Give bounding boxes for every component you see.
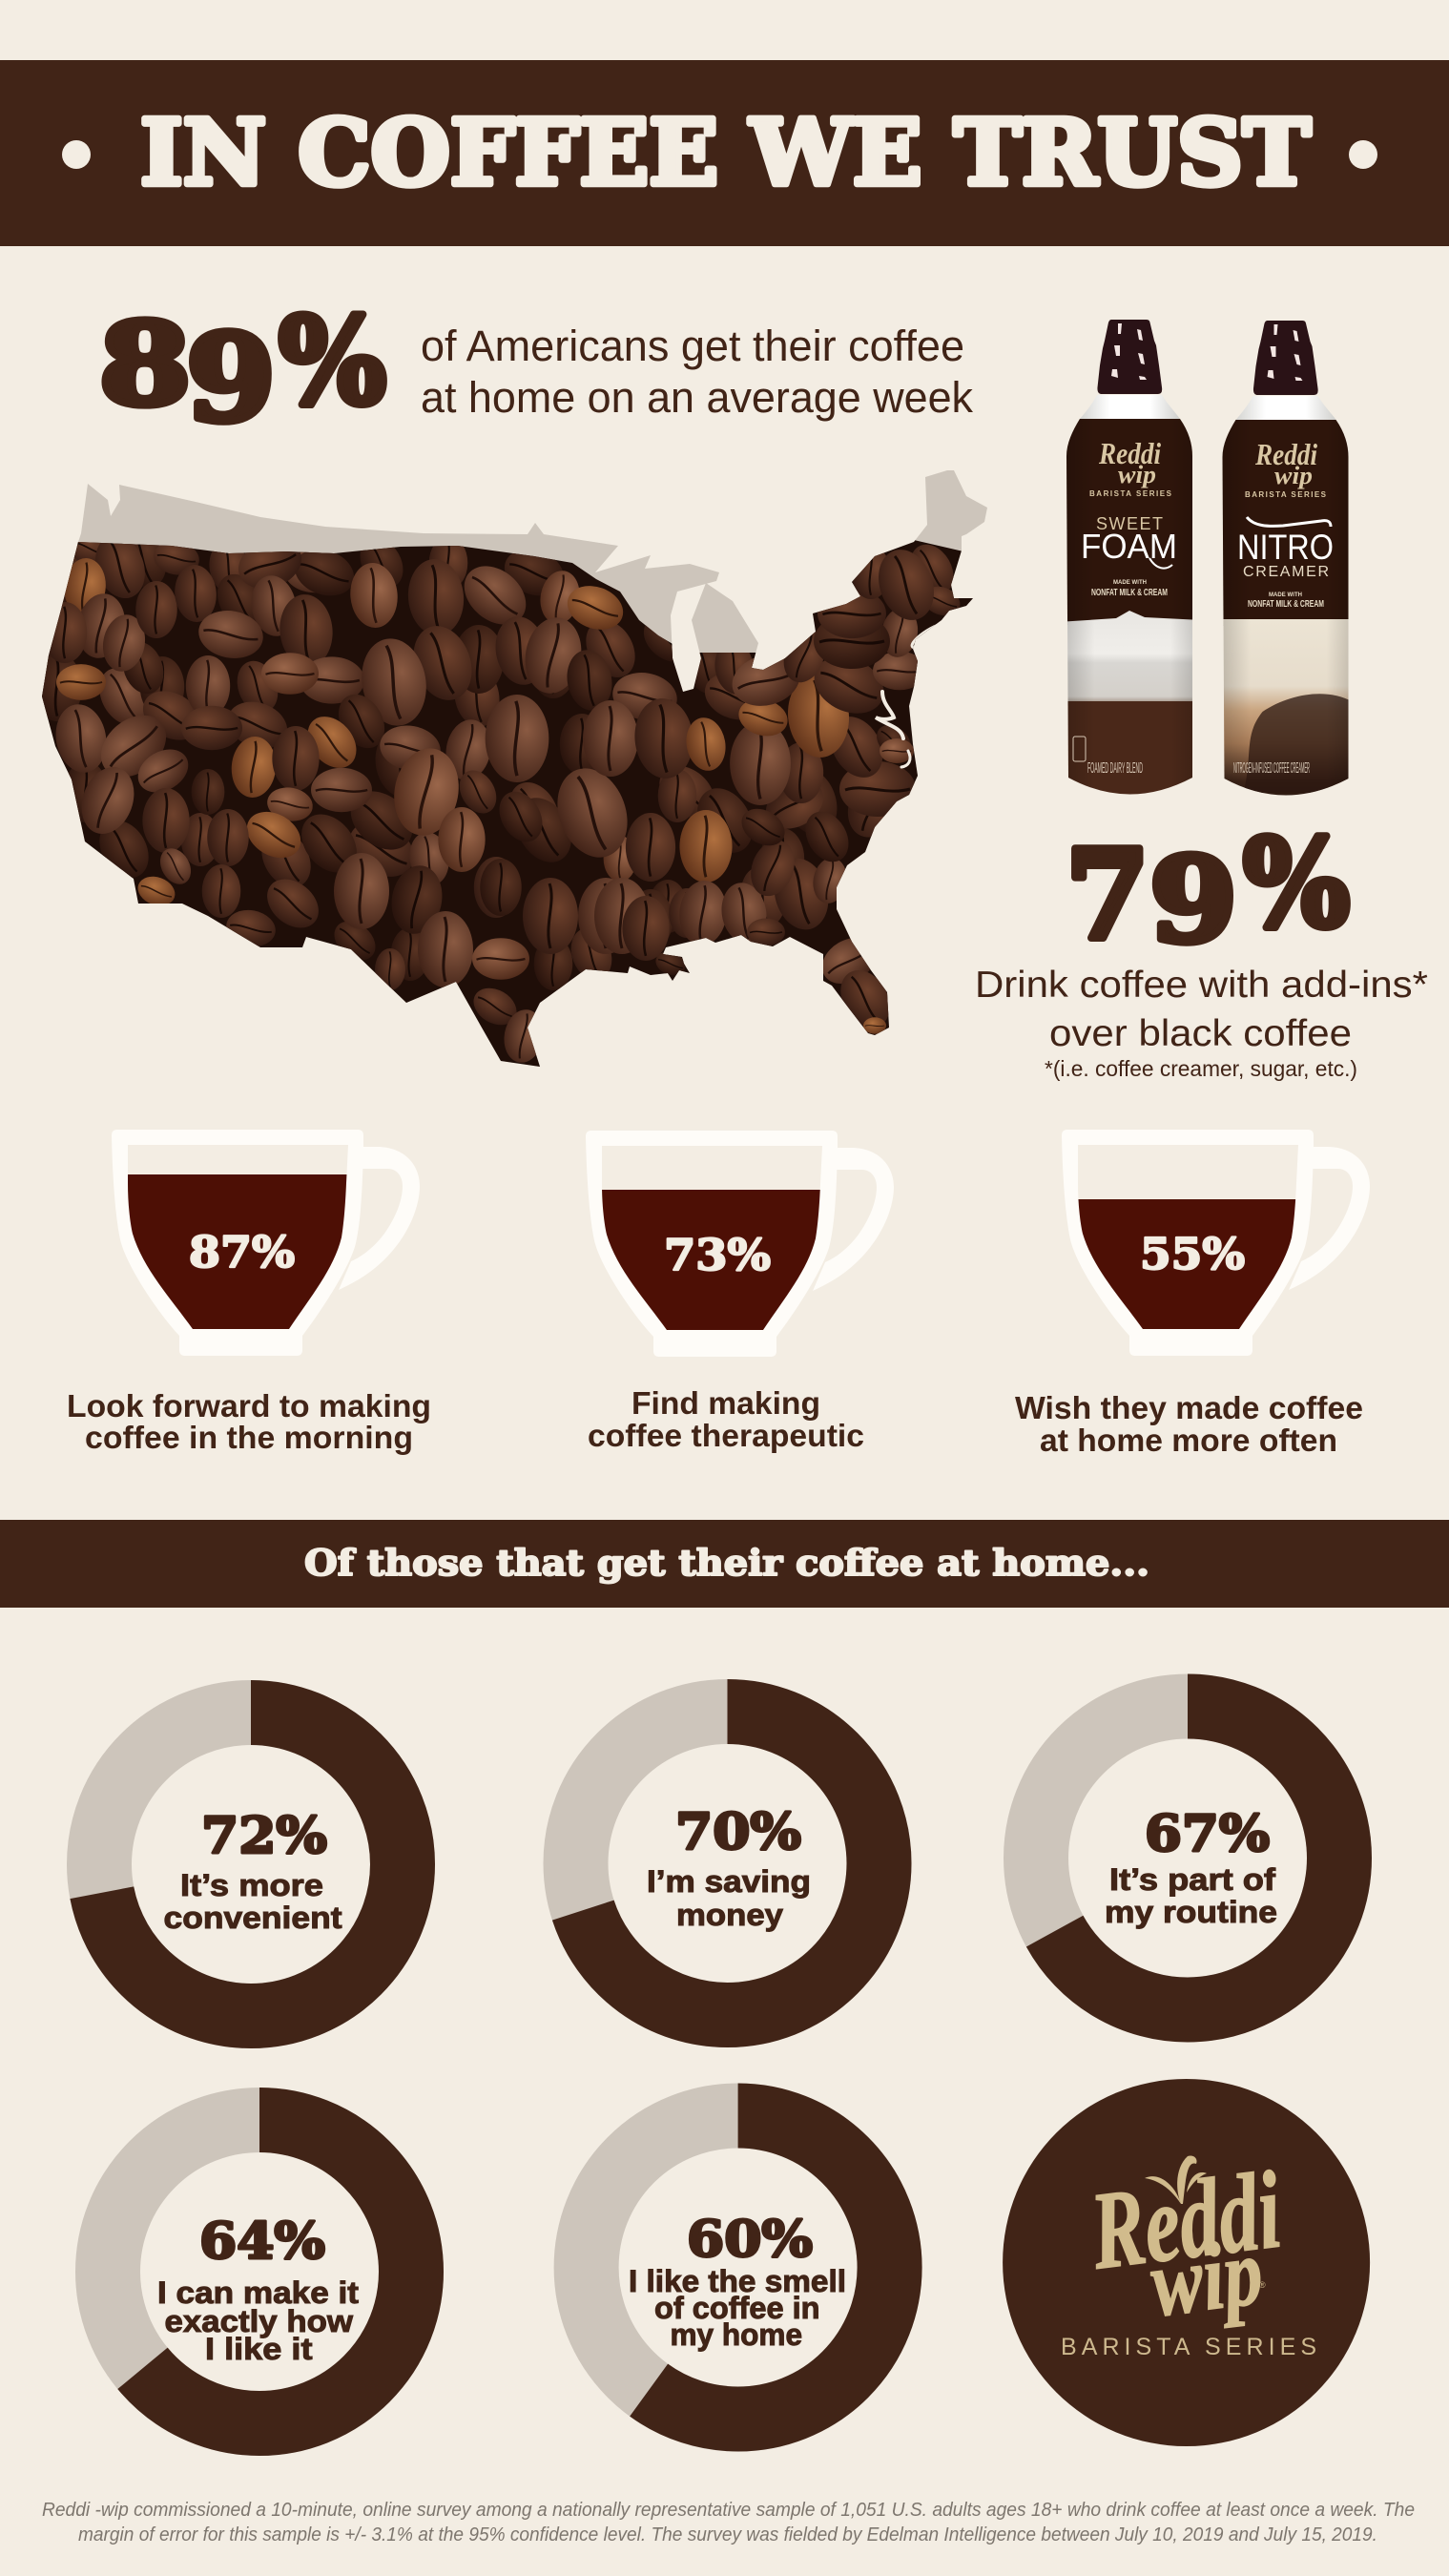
product bottle: Sweet Foam: FOAM xyxy=(1081,527,1177,566)
logo: Reddi-wip Barista Series xyxy=(1003,2079,1370,2446)
product bottle: Nitro Creamer: BARISTA SERIES xyxy=(1245,490,1327,499)
donut: 60%: I like the smell xyxy=(629,2264,846,2298)
stat: 89% at home xyxy=(99,292,973,448)
cut-outs for the Long Island sound and Chesapeake bay xyxy=(874,624,937,769)
donut: 60% xyxy=(587,2116,890,2420)
mug label: 87% xyxy=(67,1388,431,1455)
stat: 89% at home: % xyxy=(279,292,386,431)
stat: 89% at home: at home on an average week xyxy=(421,373,973,422)
section banner: Of those that get their coffee at home... xyxy=(304,1542,1149,1584)
donut: 64%: 64% xyxy=(199,2212,325,2271)
section banner xyxy=(0,1520,1449,1608)
product bottle: Nitro Creamer xyxy=(1223,321,1349,796)
map of the USA filled with coffee beans xyxy=(27,458,1002,1088)
donut: 72% xyxy=(99,1713,403,2016)
product bottle: Sweet Foam: SWEET xyxy=(1096,514,1163,533)
logo: Reddi-wip Barista Series: ® xyxy=(1259,2280,1266,2290)
donut: 60%: 60% xyxy=(687,2211,813,2269)
mug label: 73% xyxy=(588,1385,864,1453)
stat: 79% with add-ins xyxy=(975,813,1428,1081)
mug label: 55% xyxy=(1015,1390,1363,1458)
stat: 79% with add-ins: 9 xyxy=(1149,831,1237,968)
stat: 79% with add-ins: Drink coffee with add-ins* xyxy=(975,965,1428,1006)
donut: 64% xyxy=(108,2120,411,2423)
stat: 79% with add-ins: % xyxy=(1243,813,1350,954)
product bottle: Sweet Foam: FOAMED DAIRY BLEND xyxy=(1087,760,1143,777)
donut: 72%: convenient xyxy=(164,1901,342,1935)
stat: 89% at home: 9 xyxy=(186,309,276,448)
stat: 79% with add-ins: over black coffee xyxy=(1049,1013,1352,1054)
donut: 70%: 70% xyxy=(675,1803,801,1861)
donut: 72%: It’s more xyxy=(180,1868,323,1902)
donut: 60%: my home xyxy=(670,2317,802,2352)
footnote: margin of error for this sample is +/- 3.1% at the 95% confidence level. The survey was fielded by Edelman Intelligence between July 10, 2019 and July 15, 2019. xyxy=(78,2524,1377,2545)
mug label: 87%: coffee in the morning xyxy=(85,1420,413,1455)
donut: 70%: money xyxy=(676,1898,783,1932)
donut: 67% xyxy=(1036,1706,1339,2009)
stat: 89% at home: 8 xyxy=(99,298,191,430)
product bottle: Sweet Foam: BARISTA SERIES xyxy=(1089,489,1172,498)
product bottle: Nitro Creamer: CREAMER xyxy=(1243,564,1329,580)
mug label: 73%: Find making xyxy=(631,1385,820,1421)
mug label: 55%: at home more often xyxy=(1040,1423,1337,1458)
donut: 64%: I can make it xyxy=(157,2275,359,2310)
product bottle: Nitro Creamer: NITRO xyxy=(1237,528,1334,567)
donut: 64%: I like it xyxy=(205,2332,313,2366)
mug: 73%: 73% xyxy=(664,1230,771,1280)
footnote xyxy=(42,2500,1415,2545)
mug label: 73%: coffee therapeutic xyxy=(588,1418,864,1453)
donut: 67%: It’s part of xyxy=(1109,1862,1275,1897)
donut: 60%: of coffee in xyxy=(654,2291,820,2325)
stat: 79% with add-ins: *(i.e. coffee creamer, sugar, etc.) xyxy=(1045,1056,1357,1081)
logo: Reddi-wip Barista Series: Reddi xyxy=(1084,2149,1287,2294)
stat: 89% at home: of Americans get their coffee xyxy=(421,322,964,370)
mug: 55%: 55% xyxy=(1140,1229,1245,1279)
mug label: 55%: Wish they made coffee xyxy=(1015,1390,1363,1425)
donut: 70%: I’m saving xyxy=(647,1864,811,1899)
donut: 72%: 72% xyxy=(201,1807,327,1865)
mug: 87% xyxy=(112,1130,420,1356)
product bottle: Nitro Creamer: MADE WITH xyxy=(1269,592,1302,598)
product bottle: Nitro Creamer: wip xyxy=(1274,462,1313,489)
product bottle: Nitro Creamer: NONFAT MILK & CREAM xyxy=(1248,599,1324,610)
logo: Reddi-wip Barista Series: wip xyxy=(1146,2218,1268,2337)
stat: 79% with add-ins: 7 xyxy=(1066,824,1149,967)
mug: 73% xyxy=(586,1131,894,1357)
donut: 67%: 67% xyxy=(1145,1805,1270,1863)
footnote: Reddi -wip commissioned a 10-minute, online survey among a nationally representative sample of 1,051 U.S. adults ages 18+ who drink coffee at least once a week. The xyxy=(42,2500,1415,2521)
product bottle: Sweet Foam: wip xyxy=(1118,461,1156,488)
product bottle: Sweet Foam: MADE WITH xyxy=(1113,580,1147,586)
title banner: IN COFFEE WE TRUST xyxy=(140,100,1311,206)
donut: 64%: exactly how xyxy=(164,2304,353,2338)
product bottle: Sweet Foam: Reddi xyxy=(1098,436,1161,470)
logo: Reddi-wip Barista Series: BARISTA SERIES xyxy=(1061,2334,1316,2360)
donut: 67%: my routine xyxy=(1105,1895,1277,1929)
title banner xyxy=(0,60,1449,246)
product bottle: Sweet Foam: NONFAT MILK & CREAM xyxy=(1091,588,1168,598)
donut: 70% xyxy=(576,1712,880,2015)
mug: 87%: 87% xyxy=(189,1227,295,1278)
product bottle: Nitro Creamer: Reddi xyxy=(1254,437,1317,471)
mug: 55% xyxy=(1062,1130,1370,1356)
product bottle: Sweet Foam xyxy=(1066,320,1192,794)
mug label: 87%: Look forward to making xyxy=(67,1388,431,1423)
